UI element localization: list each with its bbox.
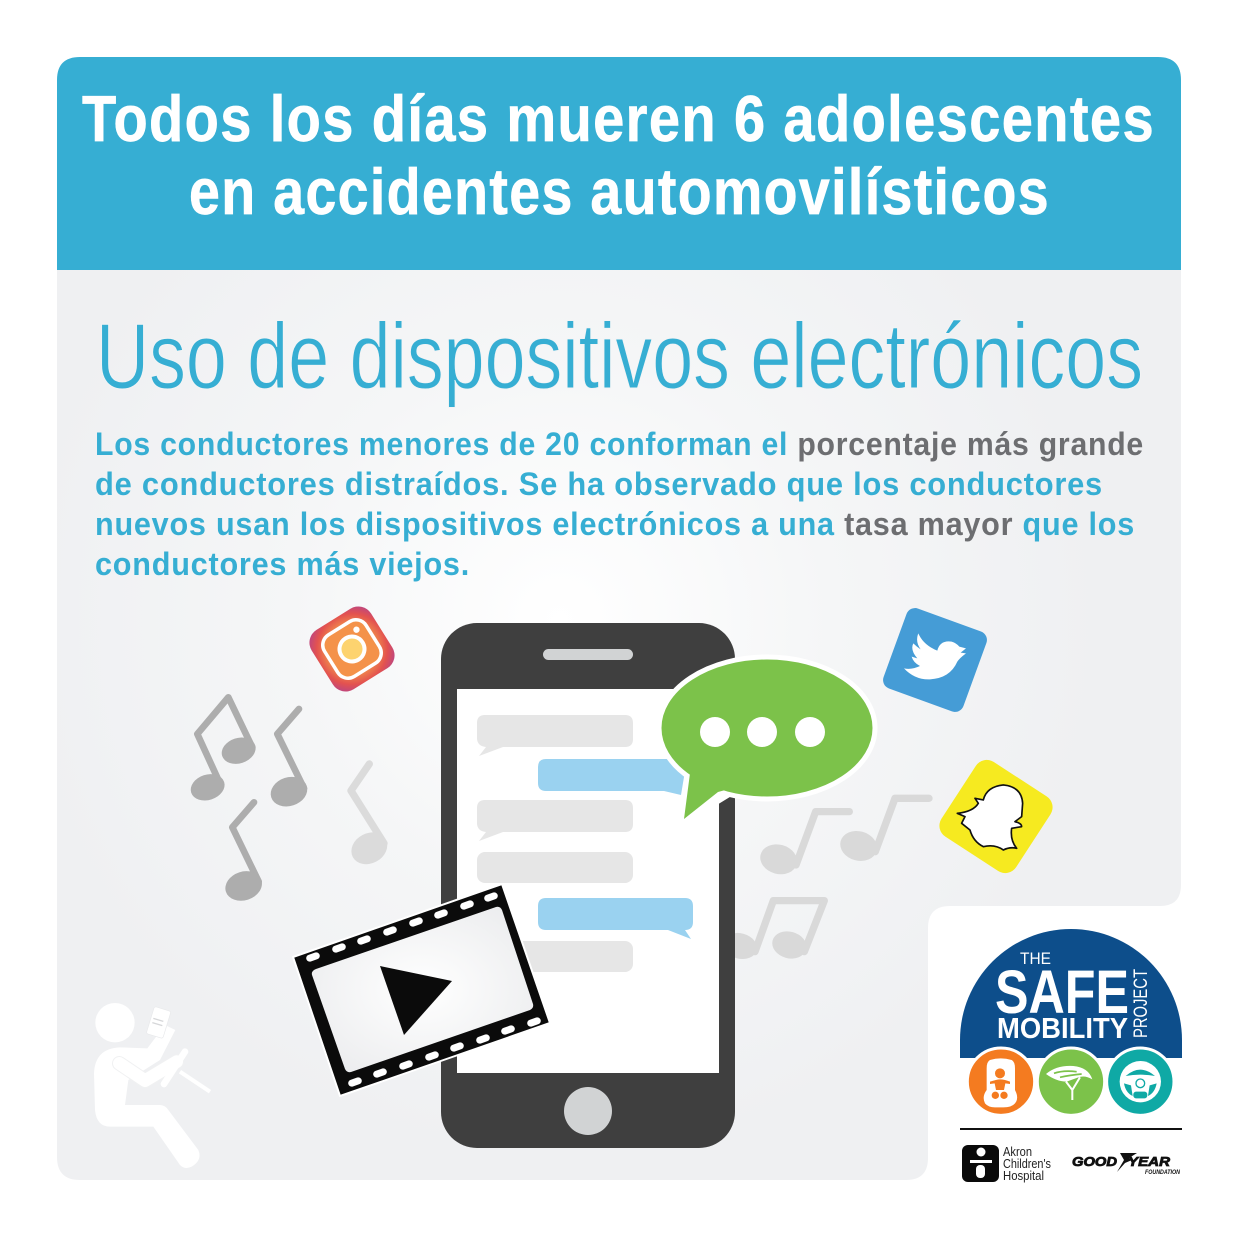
- logo text: THE: [1020, 949, 1051, 968]
- text block: intro paragraph: Los conductores menores de 20 conforman el porcentaje más grande: [95, 426, 1144, 462]
- logo: Akron Children's Hospital: Akron: [1003, 1145, 1032, 1159]
- phone screen: [457, 689, 719, 1073]
- icon: twitter: [881, 606, 989, 714]
- logo icon: car seat: [967, 1048, 1035, 1115]
- icon: smartphone: [441, 623, 735, 1148]
- logo: Goodyear Foundation: FOUNDATION: [1145, 1170, 1181, 1176]
- logo: The Safe Mobility Project: [960, 929, 1182, 1183]
- icon: snapchat: [934, 755, 1058, 878]
- chat bubbles: [477, 715, 693, 972]
- icon: light music notes right: [720, 798, 929, 963]
- logo text: [995, 949, 1152, 1045]
- film sprocket holes: [305, 891, 542, 1088]
- icon: dark music notes left: [187, 697, 393, 905]
- text block: intro paragraph: nuevos usan los dispositivos electrónicos a una tasa mayor que los: [95, 506, 1135, 542]
- panel: main background: [57, 250, 1181, 1180]
- logo text: SAFE: [995, 958, 1129, 1026]
- text block: intro paragraph: [95, 426, 1144, 582]
- logo: Akron Children's Hospital: [962, 1145, 1051, 1183]
- icon: distracted driver: [94, 1003, 210, 1168]
- phone home button: [564, 1087, 612, 1135]
- title: [82, 82, 1155, 228]
- icon: instagram: [304, 601, 400, 697]
- text block: intro paragraph: conductores más viejos.: [95, 546, 470, 582]
- icon: film strip with play: [293, 884, 550, 1096]
- logo: Goodyear Foundation: [1072, 1153, 1181, 1176]
- logo: Goodyear Foundation: GOOD: [1072, 1154, 1118, 1169]
- logo text: MOBILITY: [997, 1013, 1128, 1045]
- logo: Goodyear Foundation: YEAR: [1128, 1154, 1171, 1169]
- logo icon: steering wheel: [1107, 1048, 1174, 1115]
- icon: green speech bubble: [659, 657, 875, 824]
- panel: title banner: [57, 57, 1181, 270]
- title: en accidentes automovilísticos: [189, 155, 1050, 228]
- logo divider: [960, 1128, 1182, 1130]
- phone speaker: [543, 649, 633, 660]
- logo: Akron Children's Hospital: Hospital: [1003, 1169, 1044, 1183]
- logo text: PROJECT: [1131, 969, 1152, 1038]
- text block: intro paragraph: de conductores distraídos. Se ha observado que los conductores: [95, 466, 1103, 502]
- logo icon: helmet: [1037, 1048, 1105, 1115]
- logo: Akron Children's Hospital: Children's: [1003, 1157, 1051, 1171]
